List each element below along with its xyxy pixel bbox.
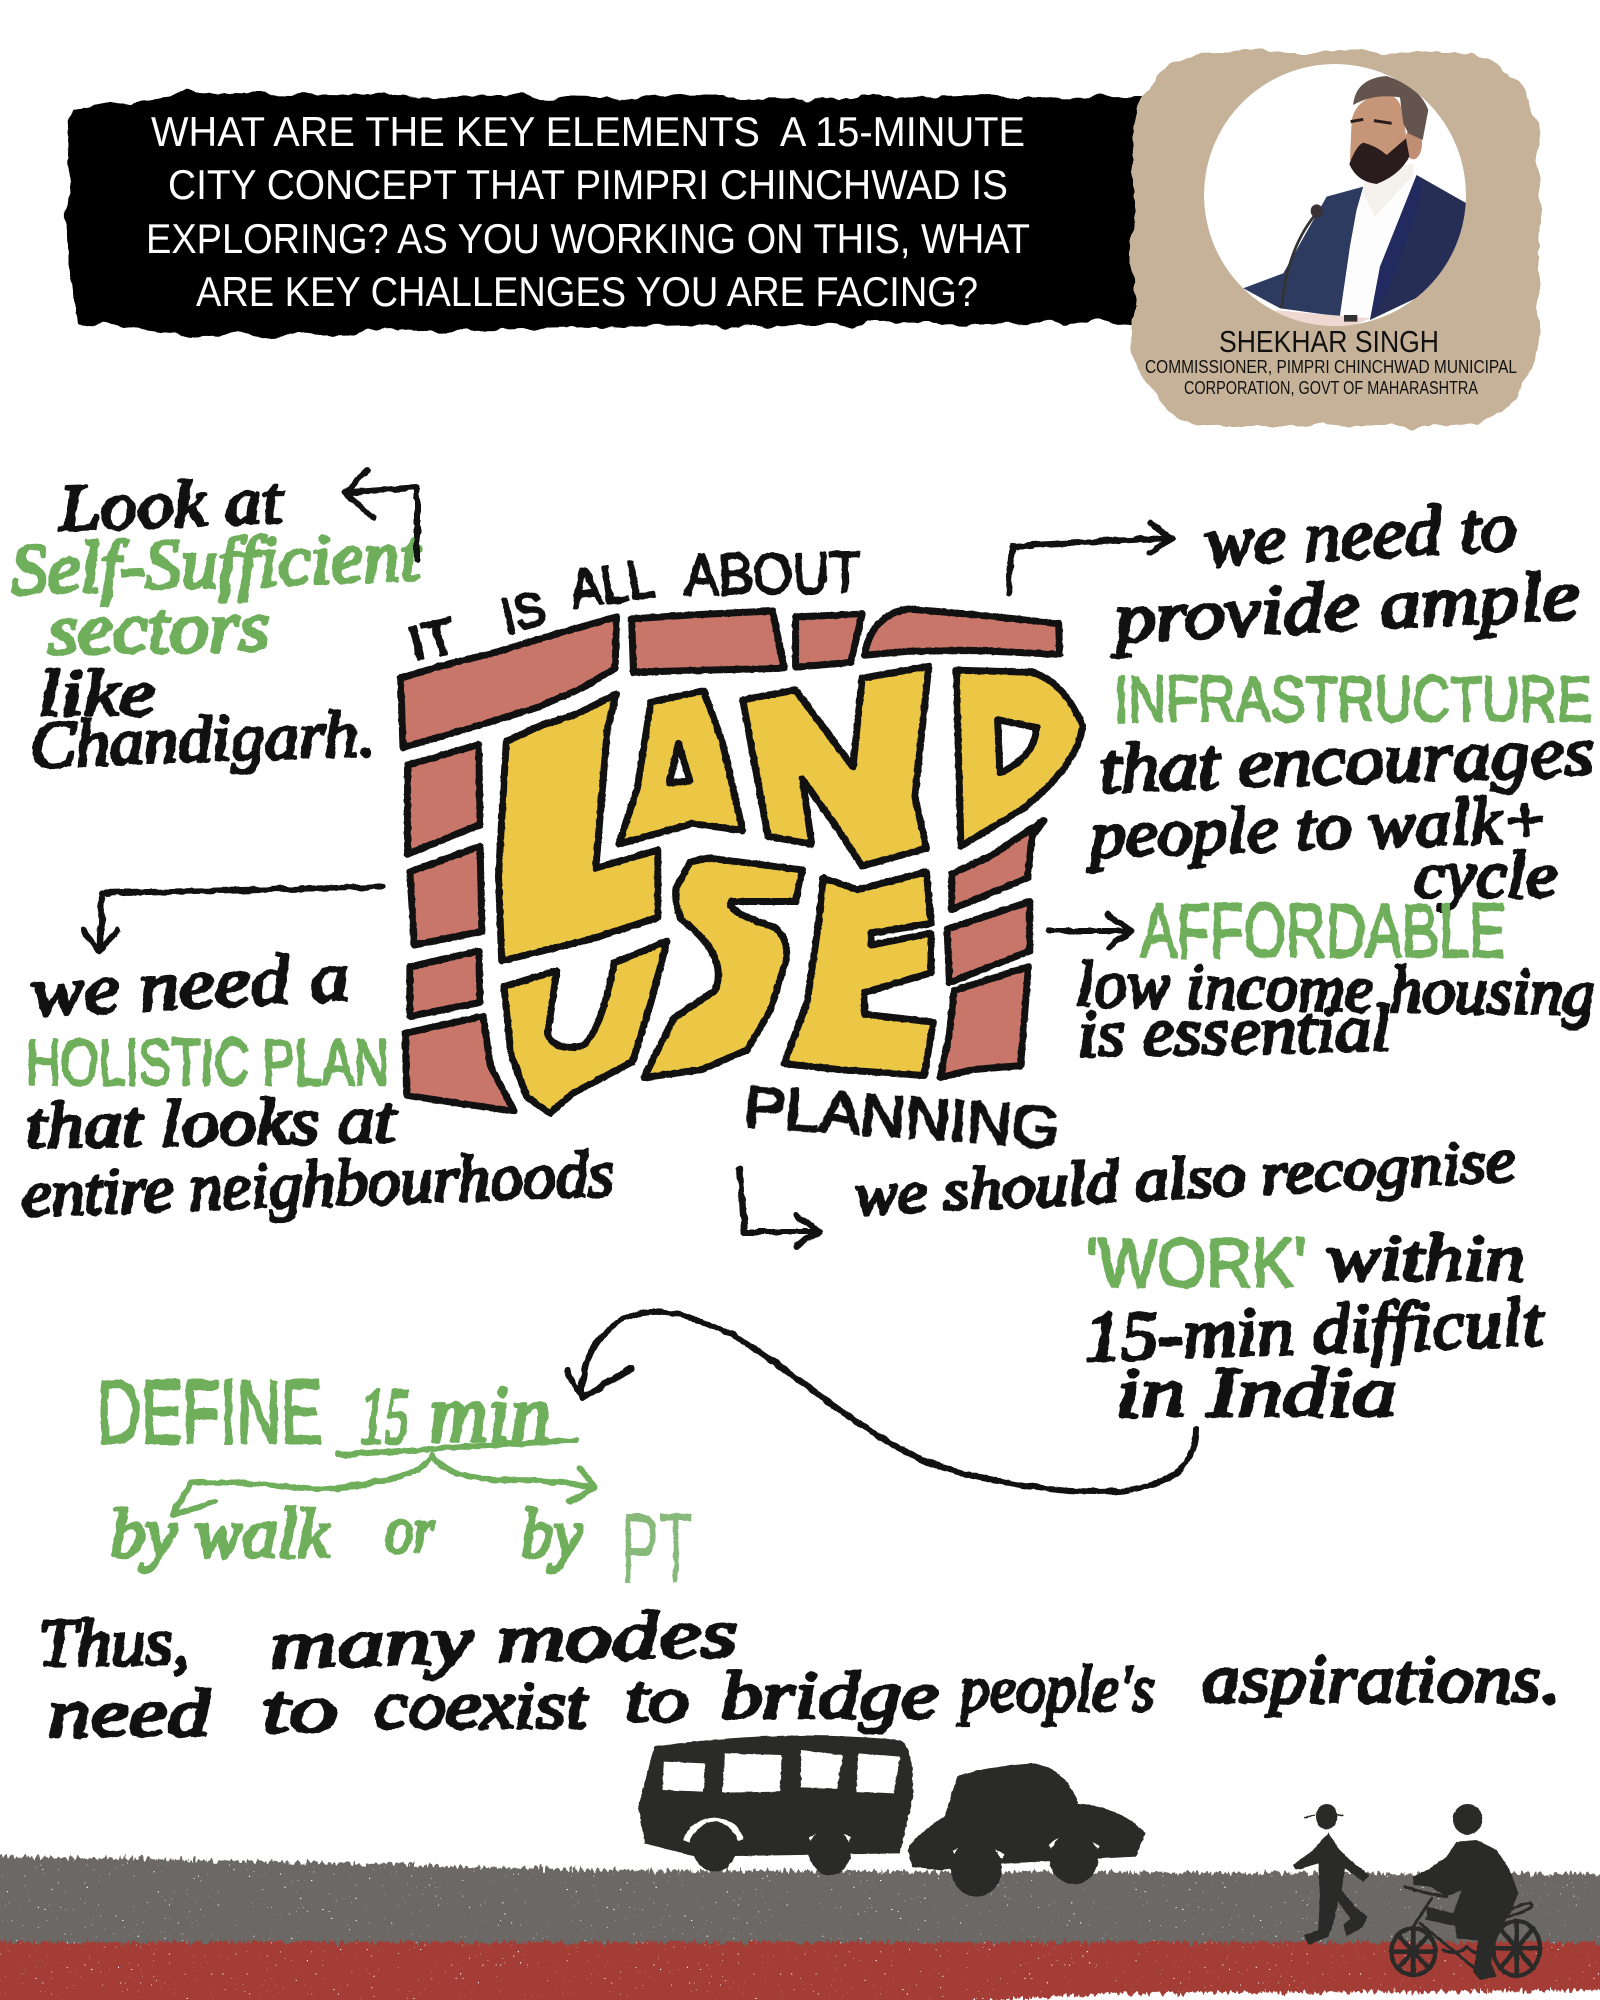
tan card [1133,52,1539,426]
bricks [401,609,1060,1111]
note: self-sufficient sectors: Look at [57,464,285,545]
arrow to holistic note [84,887,383,952]
heading: it is all about: ABOUT [684,540,861,608]
note: define 15 min [97,1363,693,1605]
note: work within 15 minutes: within [1327,1222,1525,1295]
note: holistic plan: HOLISTIC PLAN [26,1025,389,1099]
note: ample infrastructure: cycle [1414,839,1557,912]
note: define 15 min: by walk [110,1496,331,1573]
speaker title [1145,357,1517,398]
speaker title: COMMISSIONER, PIMPRI CHINCHWAD MUNICIPAL [1145,357,1517,377]
transport illustration [638,1735,1540,1980]
conclusion text: people's [956,1650,1155,1726]
conclusion text: bridge [721,1657,938,1733]
note: self-sufficient sectors [10,464,423,782]
arrow to note [345,470,417,560]
arrow to work note [740,1168,820,1246]
note: holistic plan: we need a [29,938,351,1032]
note: self-sufficient sectors: like [38,657,156,730]
note: define 15 min: by [521,1496,583,1573]
note: define 15 min: min [429,1371,551,1459]
heading: planning: PLANNING [742,1074,1062,1161]
note: self-sufficient sectors: sectors [47,586,270,670]
arrow to affordable [1049,915,1132,947]
question text: WHAT ARE THE KEY ELEMENTS A 15-MINUTE [151,108,1025,155]
icon: bus [638,1735,913,1875]
heading: it is all about: IS [495,580,551,645]
word: LAND [498,666,1083,961]
red path [0,1942,1600,2000]
note: ample infrastructure: provide ample [1107,557,1580,658]
panel: speaker profile [1133,52,1539,426]
heading: it is all about: IT [403,607,461,673]
note: work within 15 minutes: 'WORK' [1086,1224,1306,1302]
note: holistic plan: entire neighbourhoods [21,1137,615,1231]
note: define 15 min: or [385,1494,435,1567]
speaker title: CORPORATION, GOVT OF MAHARASHTRA [1184,378,1478,398]
note: affordable housing [1049,889,1596,1071]
black brush banner [69,92,1150,336]
icon: cyclist [1391,1804,1540,1980]
conclusion text: need [48,1675,211,1751]
note: work within 15 minutes: 15-min difficult [1083,1284,1546,1377]
note: affordable housing: is essential [1077,993,1391,1071]
question text [146,108,1030,315]
conclusion text: aspirations. [1202,1641,1560,1717]
word: USE [504,858,933,1113]
note: work within 15 minutes: in India [1116,1355,1397,1432]
note: holistic plan [21,887,615,1231]
question text: EXPLORING? AS YOU WORKING ON THIS, WHAT [146,215,1030,262]
note: self-sufficient sectors: Chandigarh. [29,697,376,782]
note: define 15 min: PT [621,1493,693,1605]
icon: pedestrian [1293,1804,1369,1945]
icon: car [908,1763,1145,1897]
heading: it is all about [403,540,861,673]
note: holistic plan: that looks at [25,1084,398,1163]
conclusion text: coexist [374,1667,589,1743]
note: affordable housing: low income housing [1076,948,1596,1030]
arrow to infrastructure note [1008,524,1173,593]
underline and branching arrows [173,1440,595,1515]
question text: ARE KEY CHALLENGES YOU ARE FACING? [196,268,978,315]
land use lettering [401,609,1083,1113]
note: define 15 min: 15 [361,1373,409,1461]
curved arrow to define [567,1312,1196,1492]
conclusion text: to [625,1661,689,1737]
question text: CITY CONCEPT THAT PIMPRI CHINCHWAD IS [168,161,1008,208]
conclusion text: many modes [268,1595,738,1683]
speaker photo [1204,64,1467,330]
note: ample infrastructure [1008,489,1595,912]
conclusion text: to [262,1671,338,1747]
road bands [0,1856,1600,2000]
conclusion text [38,1595,1560,1751]
grey road [0,1856,1600,1950]
note: ample infrastructure: people to walk+ [1085,783,1550,872]
note: self-sufficient sectors: Self-Sufficient [10,516,423,610]
heading: it is all about: ALL [566,549,658,620]
note: ample infrastructure: we need to [1203,489,1518,582]
note: work within 15 minutes: we should also recognise [852,1127,1517,1228]
note: work within 15 minutes [740,1127,1546,1432]
speaker name: SHEKHAR SINGH [1219,324,1439,359]
note: define 15 min: DEFINE [97,1363,322,1463]
conclusion text: Thus, [38,1604,190,1680]
note: ample infrastructure: that encourages [1098,714,1595,808]
panel: question banner [69,92,1150,336]
